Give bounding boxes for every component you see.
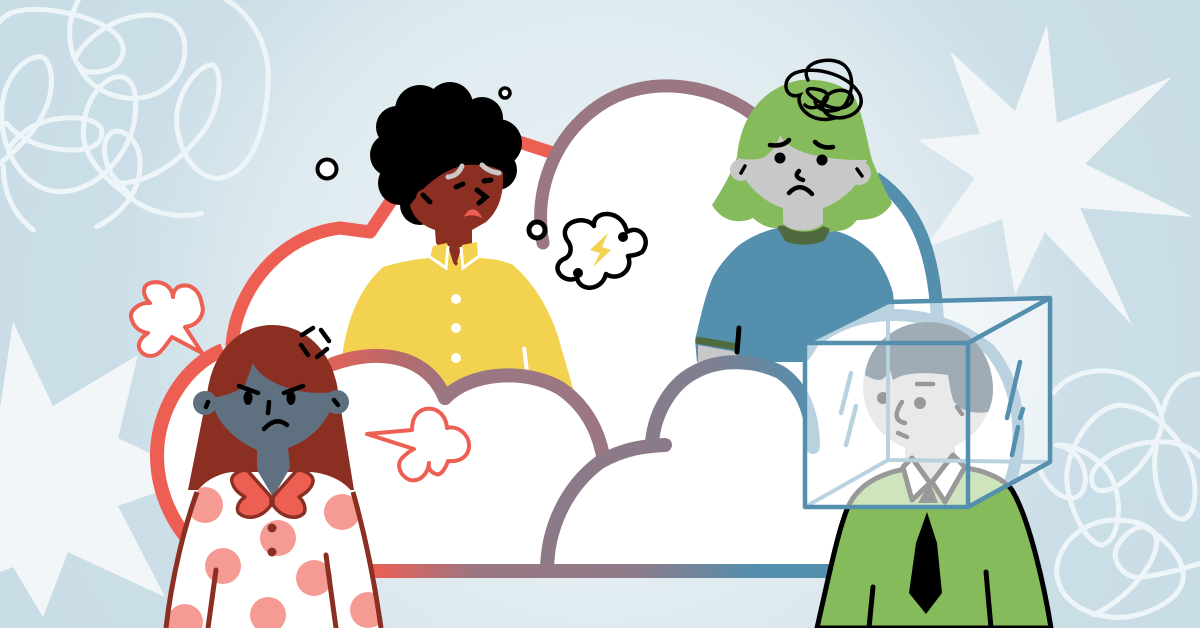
eyes	[774, 152, 828, 166]
glass cube reflections	[841, 362, 1023, 455]
base line	[360, 564, 840, 578]
neck and face	[410, 165, 503, 266]
brow, nose, mouth, ear mark	[897, 384, 962, 437]
eyes and nose	[456, 180, 491, 203]
scribble: top left	[0, 0, 268, 230]
ears	[730, 159, 752, 181]
glass cube panel	[805, 298, 1050, 507]
hair	[865, 322, 993, 413]
brows, nose, mouth and ear marks	[206, 386, 338, 429]
lower lobe arc	[547, 445, 665, 571]
scribble above head	[786, 60, 861, 119]
mouth	[466, 210, 480, 216]
speech puff: top left red	[131, 282, 203, 356]
hair	[370, 82, 522, 225]
speech puff: right red	[367, 409, 469, 480]
person: green haired woman	[695, 60, 900, 364]
upper lobe arc	[652, 362, 813, 447]
front cloud fill	[157, 316, 1017, 571]
cloud: back large cloud	[232, 84, 938, 571]
front cloud outline: middle arc	[333, 356, 445, 398]
arm crease	[524, 347, 527, 372]
hair	[188, 325, 354, 490]
bubble: small thought circle top	[500, 88, 510, 98]
ear	[416, 189, 434, 207]
shirt buttons	[451, 294, 461, 363]
front cloud outline: left red lobe	[157, 350, 223, 548]
face and neck	[211, 363, 334, 497]
cloud outline: mauve section	[541, 86, 760, 243]
cloud outline: red section	[232, 135, 553, 345]
eyes	[877, 392, 926, 409]
sleeve band	[696, 340, 738, 347]
front cloud outline: right arc	[445, 375, 603, 456]
icon: lightning bolt	[590, 233, 611, 267]
bubble: thought circle right	[529, 222, 545, 238]
arc behind glass cube	[818, 315, 1018, 482]
person: yellow shirt man	[340, 82, 575, 395]
collar	[430, 242, 478, 268]
face and neck	[738, 135, 867, 230]
eyes	[244, 391, 296, 405]
scribble: bottom right	[1040, 371, 1200, 617]
dress	[166, 472, 381, 628]
neck and head	[863, 322, 993, 452]
dress polka dots	[167, 487, 386, 628]
glass cube edges	[805, 298, 1050, 507]
cloud fill	[232, 84, 938, 571]
anger marks	[301, 328, 329, 357]
dress outline	[166, 492, 381, 628]
hair	[712, 80, 892, 232]
arm lines	[208, 555, 336, 628]
back edges of cube	[805, 302, 1050, 507]
arm line	[737, 328, 739, 352]
collar	[232, 470, 313, 517]
shirt	[340, 258, 575, 395]
bubble: thought circle left	[318, 160, 336, 178]
icon: thought cloud with lightning	[558, 214, 646, 288]
eyebrows	[448, 165, 499, 177]
buttons	[268, 524, 276, 556]
shirt	[695, 228, 900, 362]
man: tie and arm lines	[869, 512, 991, 628]
star burst: bottom left	[0, 322, 185, 617]
cloud: front cloud	[157, 315, 1018, 571]
collar	[777, 226, 830, 245]
tie knot	[918, 482, 938, 503]
star burst: top right	[918, 25, 1193, 325]
suit body	[817, 468, 1051, 628]
collar	[903, 455, 965, 502]
brows, nose, mouth	[741, 140, 862, 194]
arm	[698, 345, 737, 364]
person: angry woman	[166, 325, 386, 628]
ears	[193, 391, 217, 415]
cloud outline: blue section	[875, 178, 938, 345]
person: man with head in glass cube	[805, 302, 1051, 628]
